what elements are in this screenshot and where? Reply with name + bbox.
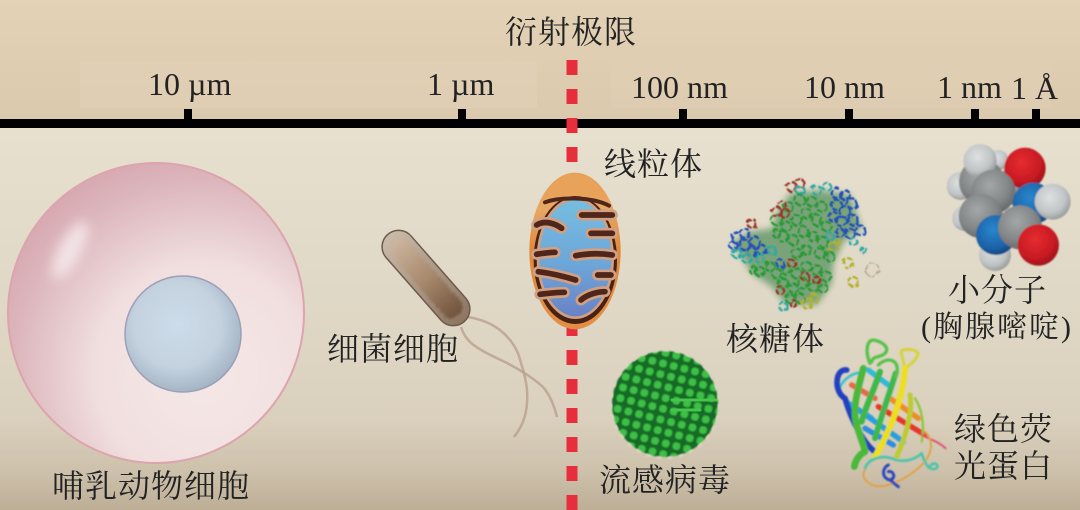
scale axis	[0, 109, 1080, 128]
label: ribosome: 核糖体	[726, 321, 825, 357]
icon: green fluorescent protein	[837, 340, 946, 487]
icon: mitochondrion	[529, 173, 621, 329]
label: mammalian cell: 哺乳动物细胞	[52, 468, 250, 504]
icon: influenza virus	[611, 350, 719, 458]
scale labels: 10 nm	[804, 69, 885, 105]
scale labels: 10 µm	[148, 66, 231, 102]
label: influenza virus: 流感病毒	[599, 462, 731, 498]
scale labels: 100 nm	[631, 69, 728, 105]
scale labels: 1 Å	[1011, 70, 1058, 106]
label: green fluorescent protein	[954, 411, 1053, 484]
label: mitochondrion: 线粒体	[604, 146, 703, 182]
icon: thymine small molecule	[947, 144, 1071, 271]
label: bacterial cell: 细菌细胞	[327, 331, 459, 367]
diffraction limit dashed line	[566, 60, 578, 510]
label: green fluorescent protein: 光蛋白	[954, 448, 1053, 484]
label: green fluorescent protein: 绿色荧	[954, 411, 1053, 447]
label: small molecule: 小分子	[948, 272, 1047, 308]
scale labels: 1 nm	[937, 69, 1002, 105]
scale labels: 1 µm	[427, 66, 494, 102]
label: thymine: (胸腺嘧啶)	[921, 311, 1073, 344]
icon: bacterial cell	[375, 224, 557, 437]
scale labels	[148, 66, 1058, 106]
icon: mammalian cell	[8, 163, 304, 463]
icon: ribosome	[729, 179, 879, 311]
heading: diffraction limit: 衍射极限	[505, 14, 637, 50]
